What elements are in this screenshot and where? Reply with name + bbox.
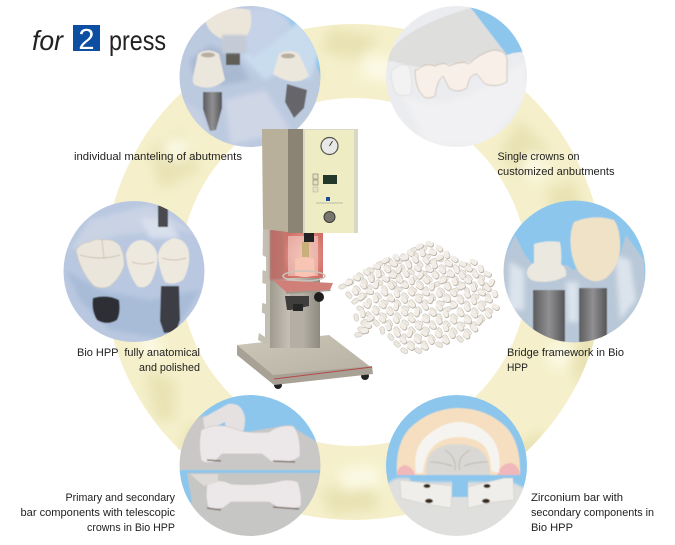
caption: bridge framework [507, 347, 624, 374]
implant left [533, 290, 565, 342]
platform [273, 280, 333, 292]
slide [290, 290, 304, 348]
crown 2 [126, 240, 157, 287]
bar right [468, 478, 514, 508]
implant short [92, 296, 120, 323]
lower model [386, 478, 528, 540]
caption: single crowns: customized anbutments [498, 166, 615, 178]
photo: individual manteling of abutments [179, 5, 322, 148]
abutment right [273, 51, 309, 82]
machine: press unit [237, 129, 373, 389]
photo: bridge framework in Bio HPP [503, 200, 647, 350]
tooth stump [395, 66, 408, 96]
photo: single crowns on customized abutments [385, 5, 530, 148]
machine base [237, 335, 373, 389]
caption: individual manteling of abutments: individual manteling of abutments [74, 151, 242, 163]
photo: primary and secondary bar components [179, 394, 322, 537]
crown [205, 8, 251, 41]
abutment left [193, 50, 225, 88]
logo box: 2: 2 [78, 24, 95, 56]
logo heading: for 2 press [32, 24, 166, 56]
chamber [270, 228, 325, 281]
caption: single crowns: Single crowns on [498, 151, 580, 163]
bridge [415, 50, 507, 98]
arch teeth [397, 408, 520, 475]
caption: zirconium bar: Zirconium bar with [531, 492, 623, 504]
upper bar [200, 425, 300, 463]
lower bar [206, 480, 301, 509]
caption: primary and secondary bar components: crowns in Bio HPP [87, 522, 175, 534]
display [323, 175, 337, 184]
knob [324, 212, 335, 222]
caption: zirconium bar [531, 492, 654, 534]
crown 3 [158, 238, 189, 284]
caption: zirconium bar: Bio HPP [531, 522, 573, 534]
decorative ring: cream dental model [100, 20, 610, 530]
bar left [400, 480, 452, 508]
column [270, 230, 320, 348]
divider [179, 470, 322, 473]
control panel [303, 129, 358, 233]
gauge [321, 138, 338, 154]
caption: primary and secondary bar components: Primary and secondary [66, 492, 175, 504]
abutment [527, 241, 566, 282]
photo: Bio HPP fully anatomical and polished [63, 200, 205, 343]
caption: single crowns [498, 151, 615, 178]
implant left [203, 92, 222, 131]
pink cylinder [295, 257, 315, 277]
buttons [313, 174, 318, 179]
caption: bridge framework: HPP [507, 362, 528, 374]
clamp and handle [285, 296, 309, 310]
implant right [285, 84, 307, 118]
caption: Bio HPP fully anatomical [77, 347, 200, 374]
crown [570, 217, 620, 281]
word: for: for [32, 25, 65, 56]
photo: zirconium bar with secondary components [385, 394, 528, 540]
secondary upright [203, 403, 246, 432]
caption: Bio HPP fully anatomical: Bio HPP fully anatomical [77, 347, 200, 359]
caption: primary and secondary bar components: bar components with telescopic [20, 507, 175, 519]
back plate [258, 225, 271, 347]
implant right [579, 288, 607, 342]
palate [426, 444, 490, 475]
caption: bridge framework: Bridge framework in Bio [507, 347, 624, 359]
material: pile of white pellets [341, 243, 500, 353]
crown 1 [76, 239, 124, 288]
caption: primary and secondary bar components [20, 492, 175, 534]
top implant [158, 205, 168, 227]
caption: zirconium bar: secondary components in [531, 507, 654, 519]
housing side [262, 129, 288, 232]
panel brand [326, 197, 330, 201]
caption: Bio HPP fully anatomical: and polished [139, 362, 200, 374]
implant long [160, 286, 180, 333]
word: press: press [109, 25, 166, 56]
inner framework [415, 422, 500, 473]
